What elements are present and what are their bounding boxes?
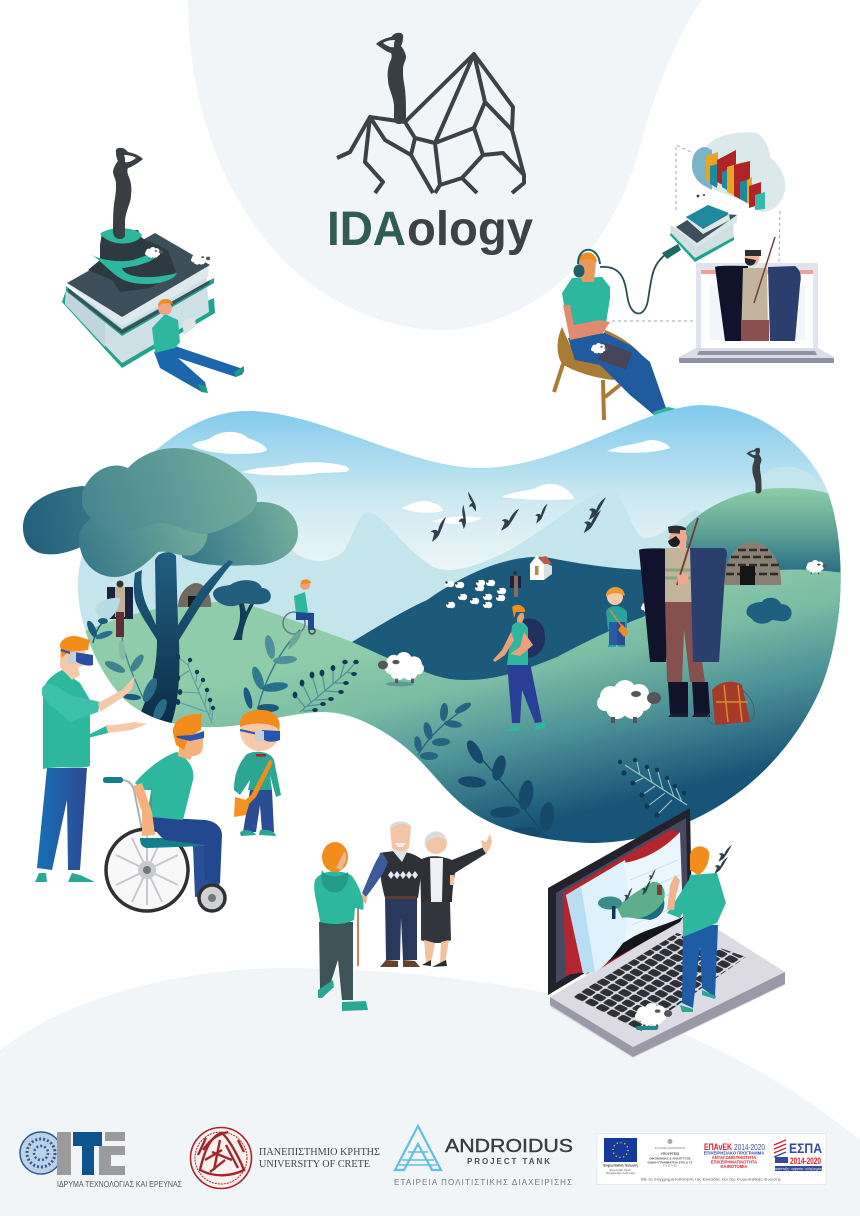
icon: statue on mountain horse bbox=[337, 33, 524, 193]
elderly couple with visitor bbox=[314, 821, 492, 1011]
EU funding panel: 2014-2020 bbox=[734, 1143, 765, 1152]
seated listener bbox=[554, 250, 677, 423]
visitor from behind bbox=[319, 922, 353, 1000]
base bbox=[550, 913, 785, 1058]
open book bbox=[566, 860, 629, 973]
EU funding panel: ΕΙΔΙΚΗ ΓΡΑΜΜΑΤΕΙΑ ΕΠΑ & ΤΣ bbox=[647, 1160, 693, 1164]
logo: ITE bbox=[20, 1132, 182, 1189]
laptop bbox=[679, 237, 834, 363]
front plants bbox=[413, 700, 687, 840]
icon: small tree bbox=[233, 604, 254, 640]
dashed connectors bbox=[612, 145, 780, 321]
old man bbox=[385, 898, 417, 960]
logo: Androidus bbox=[394, 1126, 573, 1187]
sheep on keyboard bbox=[635, 1003, 672, 1028]
woven bag bbox=[707, 682, 754, 725]
shepherd in screen bbox=[715, 266, 748, 341]
rock with green paths bbox=[88, 230, 176, 292]
EU funding panel: Ευρωπαϊκή Ένωση bbox=[603, 1164, 638, 1168]
mini shepherd bbox=[107, 587, 133, 619]
EU funding panel: ΕΣΠΑ bbox=[789, 1140, 822, 1156]
right hill bbox=[680, 488, 845, 620]
top background blob bbox=[188, 0, 702, 330]
large sprig bbox=[458, 738, 556, 840]
screen bbox=[548, 808, 692, 995]
birds near head bbox=[718, 843, 732, 864]
vest diamonds bbox=[388, 871, 418, 879]
front and left green hill bbox=[60, 569, 845, 860]
EU funding panel: Περιφερειακής Ανάπτυξης bbox=[606, 1171, 636, 1175]
EU funding panel: ΥΠΟΥΡΓΕΙΟ bbox=[661, 1152, 680, 1156]
sprig near trunk bbox=[103, 637, 170, 723]
EPAnEK: ΕΠΑνΕΚ bbox=[704, 1142, 732, 1152]
bottom background blob bbox=[0, 968, 860, 1216]
ESPA bbox=[774, 1140, 786, 1153]
illustration: person reading on giant books with statue bbox=[62, 148, 244, 393]
wordmark: IDA bbox=[327, 203, 406, 256]
logo: University of Crete bbox=[190, 1128, 380, 1188]
chapel bbox=[530, 555, 552, 580]
foreground sheep bbox=[597, 680, 661, 723]
Greek ministry bbox=[668, 1139, 672, 1144]
flower bbox=[95, 598, 120, 622]
berry plant right bbox=[293, 660, 359, 712]
VR person standing bbox=[35, 636, 147, 882]
statue bbox=[113, 148, 143, 239]
hut and mini people on left hill bbox=[85, 579, 315, 643]
right sprig bbox=[242, 630, 302, 712]
logo: University of Crete: UNIVERSITY OF CRETE bbox=[259, 1159, 370, 1170]
clouds bbox=[192, 432, 670, 524]
sheep hidden behind shepherd bbox=[641, 602, 646, 614]
small sheep right bbox=[806, 560, 827, 574]
wordmark: ology bbox=[407, 203, 533, 256]
distant mountains bbox=[60, 467, 840, 660]
wheelchair user bbox=[103, 714, 225, 911]
EU funding panel bbox=[597, 1134, 826, 1184]
giant laptop with open book bbox=[548, 808, 785, 1058]
sheep shadow bbox=[386, 682, 414, 686]
icon: stone hut bbox=[178, 583, 211, 607]
logo: Androidus: ANDROIDUS bbox=[445, 1135, 573, 1156]
EU funding panel: Με τη συγχρηματοδότηση της Ελλάδας και της Ευρωπαϊκής Ένωσης bbox=[641, 1176, 781, 1182]
flock bbox=[445, 580, 506, 608]
berry plant by trunk bbox=[176, 654, 215, 723]
small sprig bbox=[413, 700, 473, 760]
large tree canopy bbox=[23, 448, 298, 577]
keyboard bbox=[572, 933, 746, 1031]
EU funding panel: 2014-2020 bbox=[790, 1156, 821, 1166]
child walker bbox=[606, 587, 628, 647]
trunk bbox=[134, 552, 233, 728]
logo bbox=[327, 33, 533, 256]
middle hill bbox=[352, 556, 726, 680]
EU flag bbox=[604, 1138, 637, 1162]
hilltop statue bbox=[746, 448, 762, 494]
cable bbox=[600, 254, 666, 314]
bush bbox=[746, 598, 792, 624]
landscape blob bbox=[60, 400, 860, 860]
EU funding panel: ΕΠΙΧΕΙΡΗΣΙΑΚΟ ΠΡΟΓΡΑΜΜΑ bbox=[704, 1150, 764, 1156]
old woman bbox=[421, 902, 451, 943]
EU funding panel: ΑΝΤΑΓΩΝΙΣΤΙΚΟΤΗΤΑ bbox=[712, 1155, 756, 1160]
VR child bbox=[234, 710, 281, 836]
sitting reader bbox=[154, 345, 243, 391]
mini landscape bbox=[598, 869, 665, 920]
sky bbox=[154, 405, 829, 570]
EU funding panel: ΕΥΔ ΕΠΑνΕΚ bbox=[663, 1164, 678, 1168]
birds bbox=[431, 492, 606, 542]
hiker bbox=[493, 605, 546, 731]
upper book bbox=[68, 264, 209, 326]
illustration: listener with headphones, cloud books, laptop shepherd bbox=[554, 132, 834, 423]
EU funding panel: ΚΑΙΝΟΤΟΜΙΑ bbox=[721, 1164, 747, 1169]
mini shepherd far bbox=[510, 571, 521, 597]
logo: ITE: ΙΔΡΥΜΑ ΤΕΧΝΟΛΟΓΙΑΣ ΚΑΙ ΕΡΕΥΝΑΣ bbox=[57, 1180, 182, 1189]
EU funding panel: ανάπτυξη · εργασία · αλληλεγγύη bbox=[775, 1167, 822, 1171]
logo: University of Crete: ΠΑΝΕΠΙΣΤΗΜΙΟ ΚΡΗΤΗΣ bbox=[259, 1147, 380, 1158]
logo: Androidus: ΕΤΑΙΡΕΙΑ ΠΟΛΙΤΙΣΤΙΚΗΣ ΔΙΑΧΕΙΡΙΣΗΣ bbox=[394, 1178, 572, 1187]
mini wheelchair rider bbox=[283, 612, 305, 634]
EU funding panel: ΟΙΚΟΝΟΜΙΑΣ & ΑΝΑΠΤΥΞΗΣ bbox=[649, 1156, 691, 1160]
EU funding panel: Ευρωπαϊκό Ταμείο bbox=[610, 1168, 632, 1172]
large tree trunk and plants bbox=[103, 552, 359, 728]
EU funding panel: ΕΛΛΗΝΙΚΗ ΔΗΜΟΚΡΑΤΙΑ bbox=[655, 1146, 686, 1150]
right berry sprig bbox=[618, 758, 687, 818]
icon: stone hut bbox=[725, 542, 781, 585]
large wheel bbox=[106, 829, 188, 911]
standing person bbox=[682, 925, 718, 1008]
lower book bbox=[62, 290, 215, 368]
chair bbox=[554, 364, 620, 420]
book stack bbox=[670, 194, 737, 262]
cloud of books bbox=[692, 132, 785, 212]
small wheel bbox=[199, 885, 225, 911]
logo: Androidus: PROJECT TANK bbox=[467, 1157, 550, 1166]
EU funding panel: ΕΠΙΧΕΙΡΗΜΑΤΙΚΟΤΗΤΑ bbox=[711, 1160, 757, 1164]
sheep on hill left bbox=[378, 652, 424, 683]
foreground shepherd bbox=[639, 518, 727, 717]
